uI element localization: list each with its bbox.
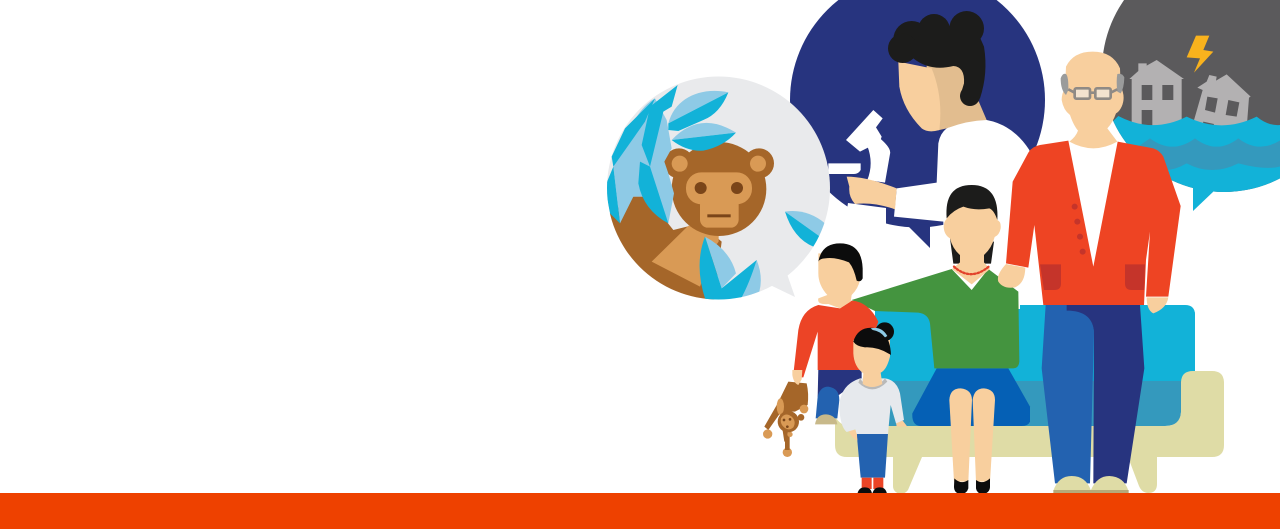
neck and head <box>1062 52 1124 148</box>
mother skirt <box>912 368 1030 426</box>
boy trousers <box>815 369 862 424</box>
girl <box>839 322 907 494</box>
boy head <box>818 253 860 308</box>
icon: house <box>1129 60 1184 128</box>
scientist arm <box>847 177 897 209</box>
glasses <box>1068 88 1117 99</box>
hands <box>998 264 1168 313</box>
necklace <box>954 267 989 274</box>
lab coat <box>894 120 1040 260</box>
pockets <box>1040 264 1145 290</box>
icon: lightning <box>1187 36 1213 73</box>
mother legs <box>949 388 995 482</box>
icon: tilted house <box>1192 74 1251 128</box>
mother hair strands <box>950 238 994 264</box>
boy hand <box>792 370 802 385</box>
grandfather <box>998 52 1181 494</box>
sofa <box>835 305 1224 494</box>
boy sweater <box>793 301 878 377</box>
girl hands <box>848 421 907 441</box>
monkey body <box>610 196 722 300</box>
girl hair <box>853 322 894 355</box>
girl collar <box>858 378 887 389</box>
icon: microscope <box>828 110 890 183</box>
trousers <box>1042 305 1144 483</box>
mother hair <box>946 185 997 220</box>
mother <box>852 185 1030 494</box>
mother sweater <box>852 269 1019 368</box>
girl trousers <box>857 433 888 478</box>
monkey head <box>664 142 774 236</box>
water <box>1113 116 1280 192</box>
white shirt <box>1068 140 1118 267</box>
cardigan <box>1006 141 1181 305</box>
boy <box>793 243 878 424</box>
girl socks <box>862 478 883 489</box>
mother head <box>944 205 1001 262</box>
scientist hair <box>888 11 985 106</box>
mother neck <box>952 248 990 284</box>
shoes <box>1053 476 1129 494</box>
scientist head <box>927 63 987 131</box>
buttons <box>1072 204 1086 255</box>
bubble: scientist <box>790 0 1045 260</box>
bubble: flooded houses <box>1103 0 1280 211</box>
girl head <box>853 340 890 387</box>
bottom bar <box>0 493 1280 529</box>
mother shoes <box>954 478 990 494</box>
bubble: monkey <box>600 76 830 307</box>
girl shoes <box>857 487 887 494</box>
toy monkey <box>763 370 808 457</box>
hair <box>1061 74 1124 95</box>
boy hair <box>818 243 863 281</box>
leaves <box>605 85 825 303</box>
girl sweater <box>839 378 904 434</box>
